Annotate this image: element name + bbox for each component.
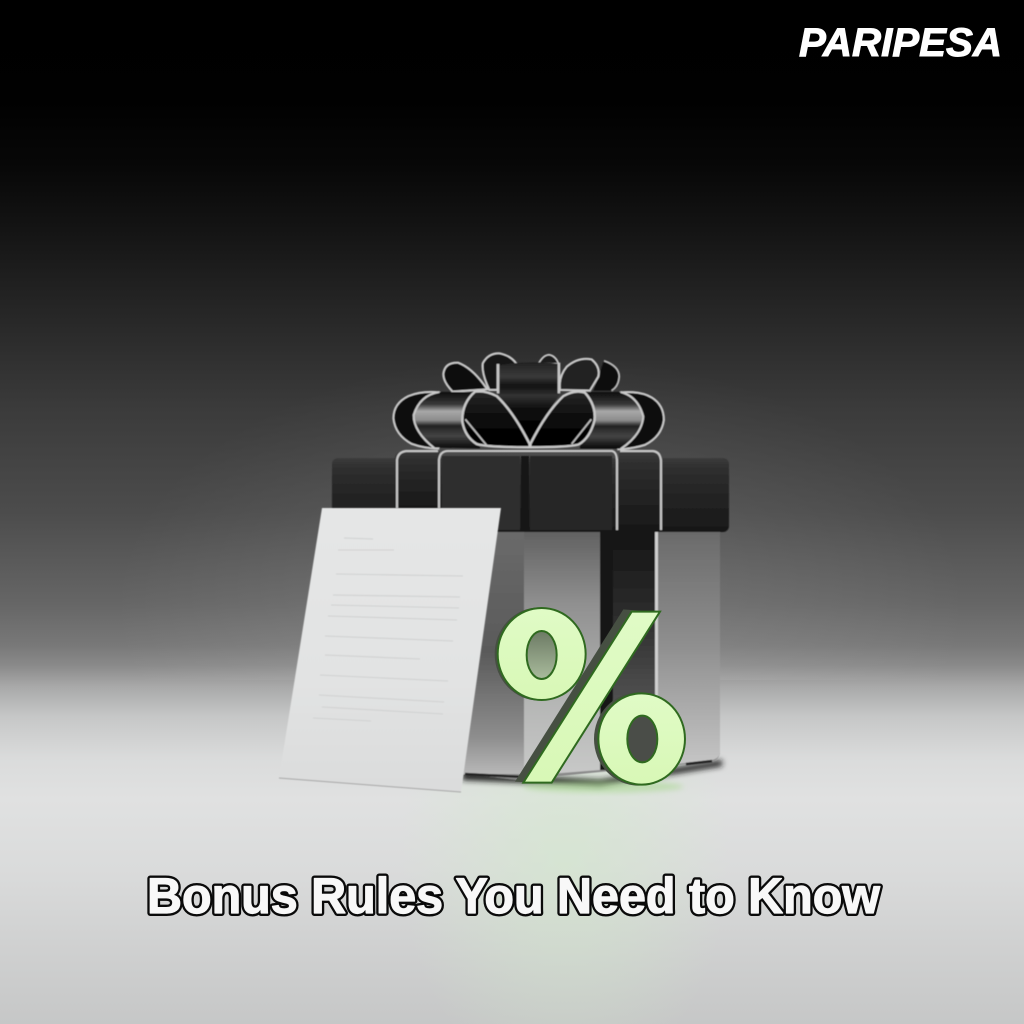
- bow: left side loop: [393, 392, 439, 449]
- bow: [393, 353, 664, 449]
- document text lines: [313, 538, 463, 721]
- bow: far right loop: [593, 361, 619, 391]
- illustration: gift box: [332, 353, 729, 786]
- percent floor glow: [523, 781, 683, 793]
- percent side extrusion: [495, 607, 683, 786]
- percent holes: [527, 631, 557, 679]
- title: Bonus Rules You Need to Know: [147, 868, 880, 924]
- box body: [400, 530, 720, 780]
- lid: [332, 451, 729, 532]
- bow: centre loop: [497, 362, 559, 442]
- icon: glowing green 3D percent symbol: [495, 607, 685, 793]
- document: rules sheet: [279, 508, 501, 792]
- logo: PARIPESA: PARIPESA: [799, 21, 1002, 65]
- bow: upper loops: [443, 363, 487, 392]
- bow: front petals: [462, 391, 530, 447]
- bow: right side loop: [618, 392, 664, 449]
- box shadow on floor: [462, 760, 722, 786]
- title: Bonus Rules You Need to Know: [147, 868, 880, 924]
- percent front faces: [498, 608, 685, 785]
